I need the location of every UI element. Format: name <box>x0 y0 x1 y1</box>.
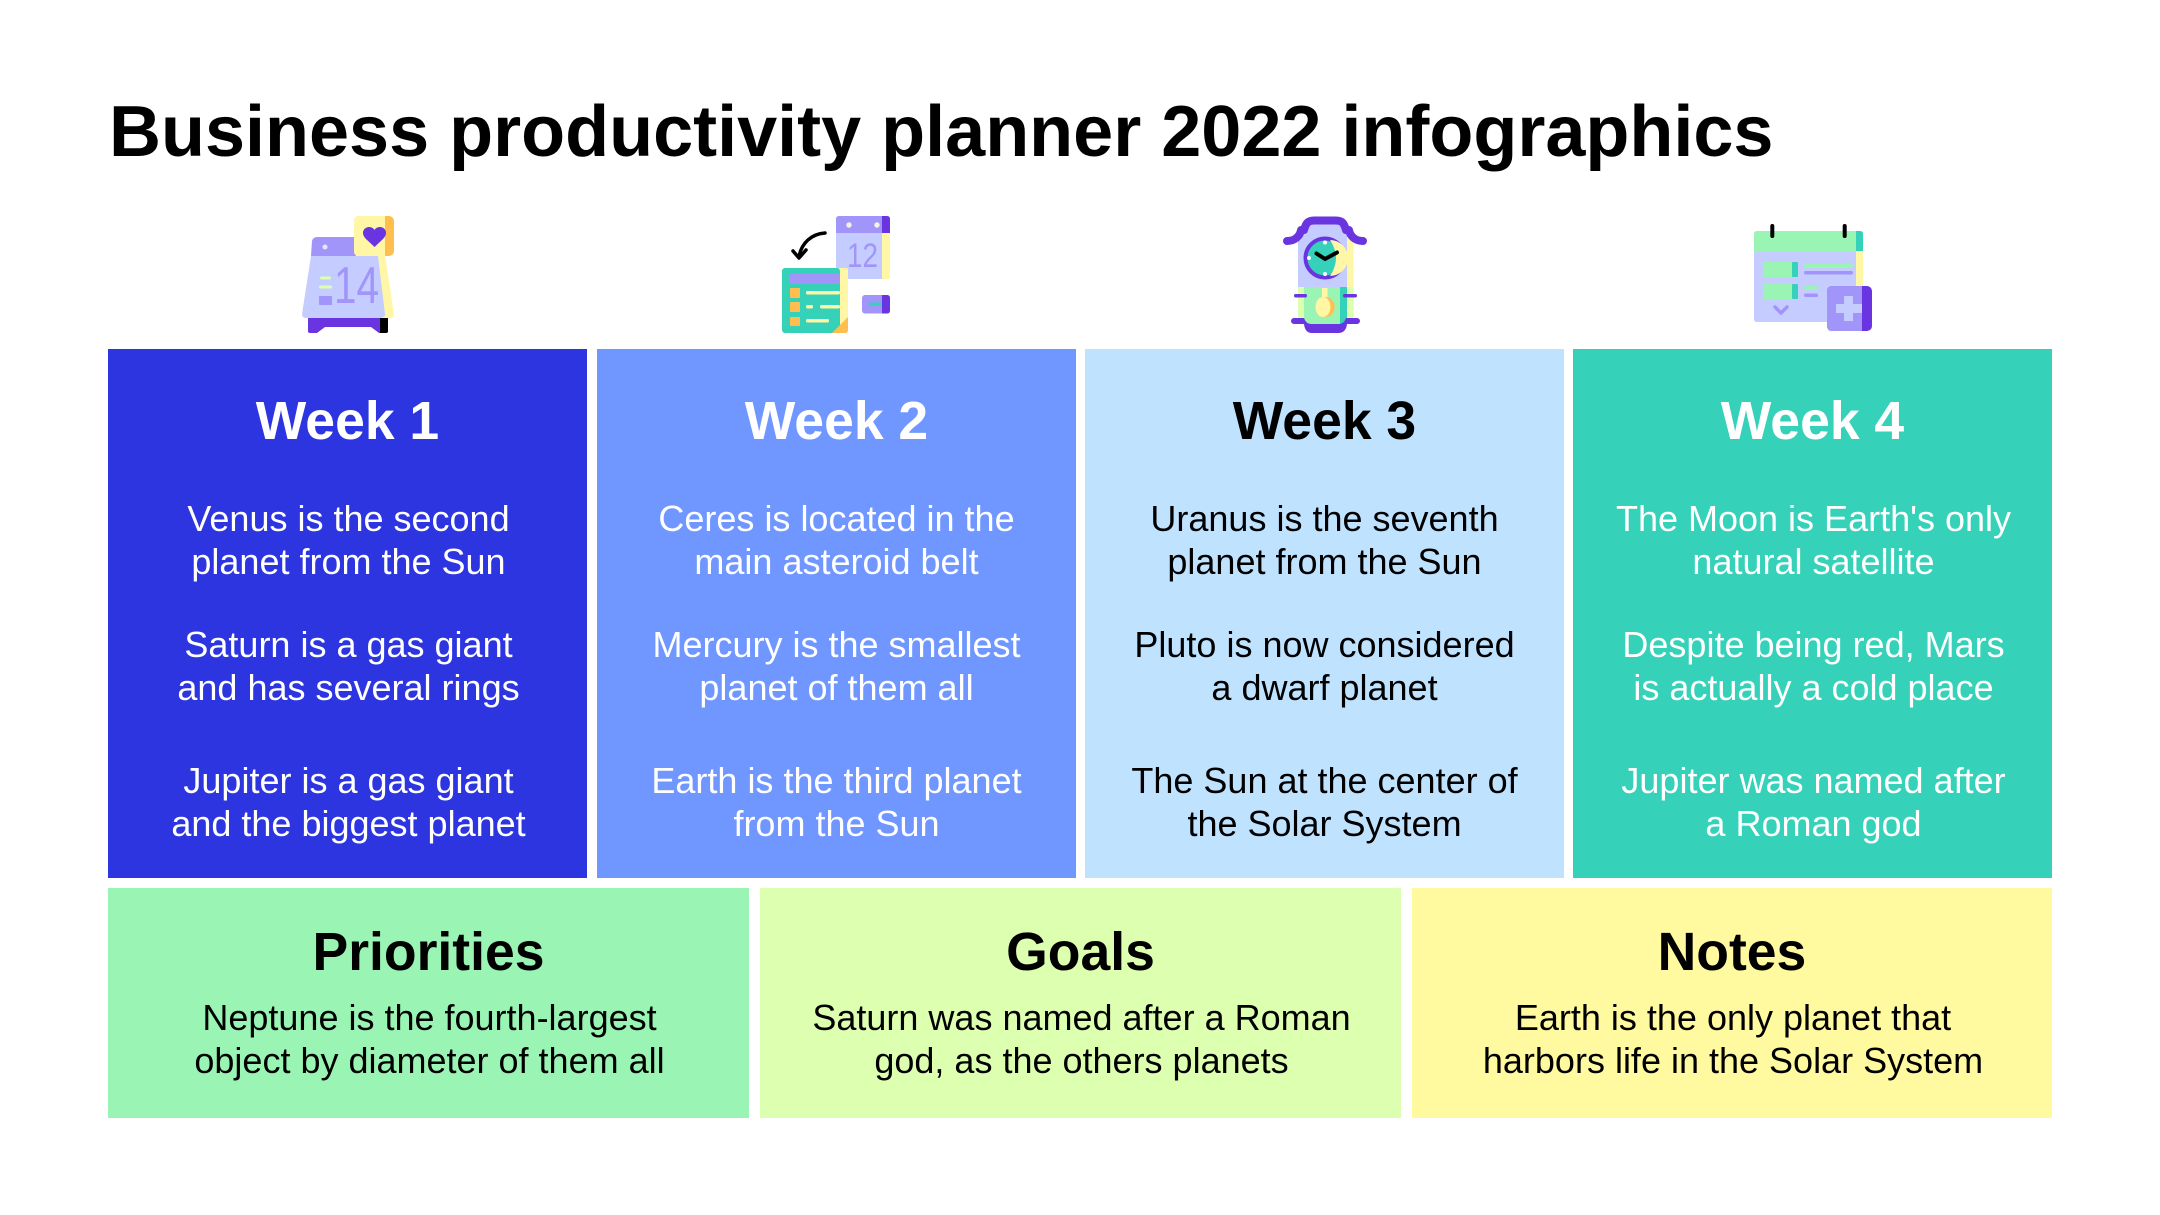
text: saturn: and has several rings <box>177 667 520 708</box>
icon: desk calendar with heart note: 14 <box>334 257 379 315</box>
text: pluto: a dwarf planet <box>1211 667 1438 708</box>
text: jupiter: Jupiter is a gas giant <box>183 760 514 800</box>
text: ceres: main asteroid belt <box>694 541 979 582</box>
heading: week 2: Week 2 <box>745 392 928 450</box>
text: venus <box>187 498 510 582</box>
text: sun <box>1131 760 1518 844</box>
text: moon: natural satellite <box>1692 541 1935 582</box>
text: earth: from the Sun <box>733 803 940 844</box>
text: jupiter: and the biggest planet <box>171 803 526 844</box>
panel: week 3 <box>1085 349 1564 878</box>
icon: pendulum clock <box>1287 220 1363 333</box>
text: sun: the Solar System <box>1187 803 1462 844</box>
text: mars: is actually a cold place <box>1633 667 1994 708</box>
text: jupiter <box>1621 760 2006 844</box>
text: earth <box>651 760 1022 844</box>
text: earth: Earth is the third planet <box>651 760 1022 800</box>
heading: week 3: Week 3 <box>1233 392 1416 450</box>
text: mars: Despite being red, Mars <box>1622 624 2005 664</box>
panel: week 1 <box>108 349 587 878</box>
text: pluto <box>1134 624 1515 708</box>
text: mercury: planet of them all <box>699 667 974 708</box>
text: uranus: planet from the Sun <box>1167 541 1482 582</box>
panel: week 2 <box>597 349 1076 878</box>
heading: goals: Goals <box>1006 922 1155 982</box>
text: neptune <box>194 996 665 1081</box>
text: saturn: god, as the others planets <box>874 1040 1289 1081</box>
text: neptune: Neptune is the fourth-largest <box>202 996 657 1038</box>
text: saturn: Saturn is a gas giant <box>184 624 513 664</box>
text: pluto: Pluto is now considered <box>1134 624 1515 664</box>
icon: wall calendar with plus <box>1754 224 1872 331</box>
text: jupiter: a Roman god <box>1705 803 1922 844</box>
heading: notes: Notes <box>1658 922 1806 982</box>
icon: desk calendar with heart note <box>302 216 394 333</box>
text: moon: The Moon is Earth's only <box>1616 498 2011 538</box>
text: earth: harbors life in the Solar System <box>1483 1040 1983 1081</box>
text: uranus <box>1150 498 1499 582</box>
icon: calendar and checklist with arrow <box>782 216 890 333</box>
heading: week 4: Week 4 <box>1721 392 1904 450</box>
icon: calendar and checklist with arrow: 12 <box>847 237 878 275</box>
text: mercury: Mercury is the smallest <box>652 624 1021 664</box>
text: ceres <box>658 498 1015 582</box>
text: jupiter <box>171 760 526 844</box>
text: sun: The Sun at the center of <box>1131 760 1518 800</box>
text: saturn: Saturn was named after a Roman <box>812 996 1351 1038</box>
text: jupiter: Jupiter was named after <box>1621 760 2006 800</box>
text: neptune: object by diameter of them all <box>194 1040 665 1081</box>
text: venus: Venus is the second <box>187 498 510 538</box>
text: earth: Earth is the only planet that <box>1515 996 1951 1038</box>
panel: notes <box>1412 888 2052 1118</box>
text: earth <box>1483 996 1983 1081</box>
text: venus: planet from the Sun <box>191 541 506 582</box>
heading: priorities: Priorities <box>313 922 544 982</box>
text: mars <box>1622 624 2005 708</box>
heading: week 1: Week 1 <box>256 392 439 450</box>
panel: priorities <box>108 888 749 1118</box>
text: saturn <box>177 624 520 708</box>
text: saturn <box>812 996 1351 1081</box>
icons row <box>302 216 1872 333</box>
text: ceres: Ceres is located in the <box>658 498 1015 538</box>
panel: week 4 <box>1573 349 2052 878</box>
title: Business productivity planner 2022 infographics <box>109 92 1773 172</box>
text: mercury <box>652 624 1021 708</box>
panel: goals <box>760 888 1401 1118</box>
text: uranus: Uranus is the seventh <box>1150 498 1499 538</box>
text: moon <box>1616 498 2011 582</box>
